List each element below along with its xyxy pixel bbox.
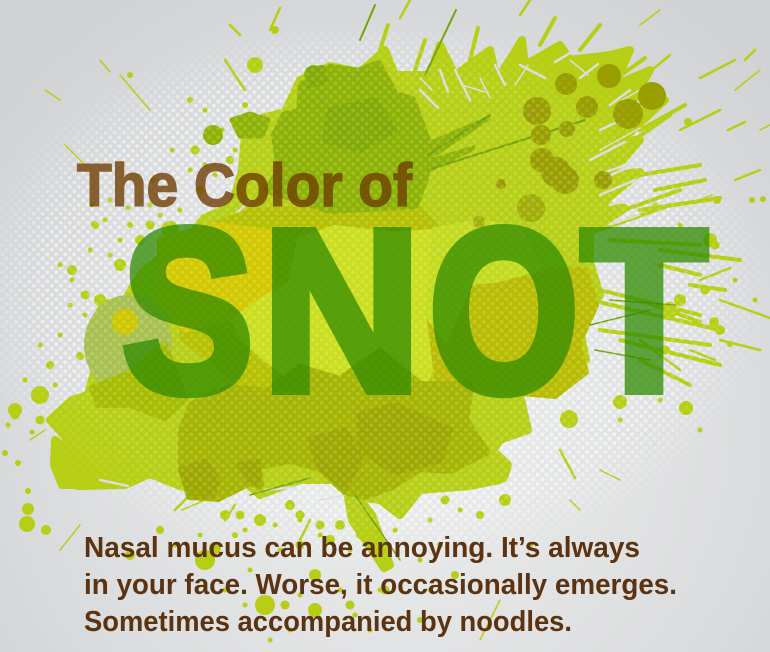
letter O: O — [429, 182, 579, 441]
halftone dots on background — [6, 47, 730, 521]
splatter: dark rays — [250, 5, 675, 560]
splatter: yellow-olive core — [160, 205, 596, 396]
splatter: olive dark texture — [182, 405, 450, 496]
splatter: olive lower blob — [182, 352, 486, 498]
splatter: dark green top blob — [203, 64, 490, 210]
heading: The Color of: The Color of — [77, 152, 413, 219]
splatter: small specks — [8, 110, 755, 640]
splatter: olive droplets top right — [473, 64, 666, 228]
intro line 2: in your face. Worse, it occasionally emerges. — [84, 569, 677, 601]
letter T: T — [581, 183, 707, 439]
splatter: pale grey-green left blob — [84, 295, 185, 418]
splatter: background-coloured gaps in the streaks — [100, 50, 650, 500]
halftone dot overlay — [32, 33, 750, 557]
heading word: SNOT — [122, 181, 707, 441]
letter N: N — [262, 182, 421, 439]
intro line 1: Nasal mucus can be annoying. It’s always — [84, 532, 640, 564]
intro line 3: Sometimes accompanied by noodles. — [84, 606, 572, 638]
intro text — [84, 532, 677, 638]
letter S: S — [122, 181, 254, 441]
